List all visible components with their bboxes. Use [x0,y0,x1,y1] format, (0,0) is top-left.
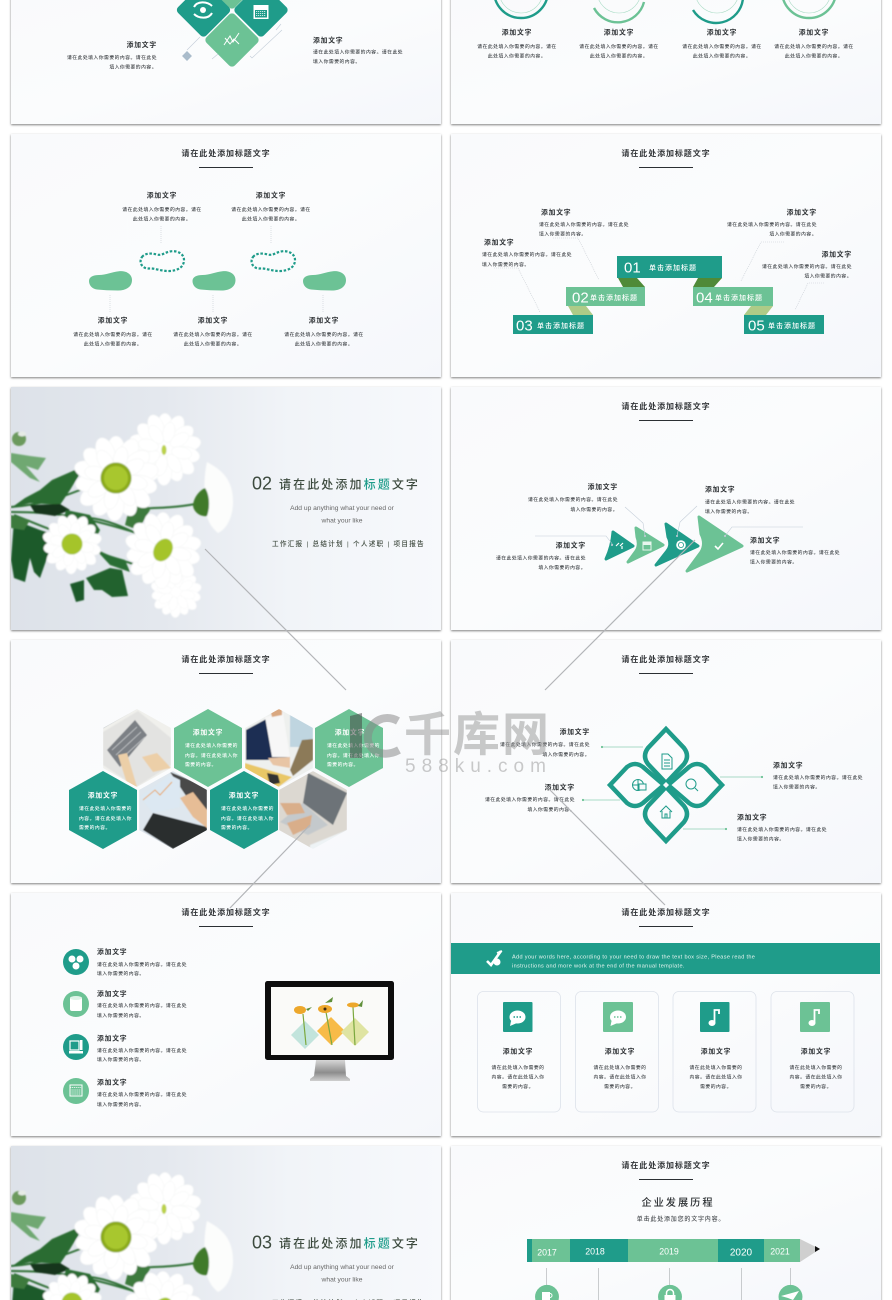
text hexagon: teal 2: 添加文字 [229,790,259,800]
heading: 请在此处添加标题文字 [182,148,270,158]
petal: top [645,729,687,783]
text block: bottom 2: 此处填入你需要的内容。 [184,340,242,348]
timeline subtitle: 单击此处添加您的文字内容。 [637,1215,725,1223]
arrow 1 [606,532,633,559]
text block: left: 填入你需要的内容。 [109,64,157,70]
text block 4: 请在此处填入你需要的内容。请在 [774,43,854,50]
text hexagon: green 2 [315,709,383,787]
banner: instructions and more work at the end of the manual template. [512,964,685,970]
text hexagon: green 1: 请在此处填入你需要的 [185,742,238,749]
text block 1: 填入你需要的内容。 [542,751,590,758]
panel: four-petal diamond slide [451,640,881,883]
card 3: 内容。请在此处填入你 [690,1074,742,1080]
icon: top green diamond [204,0,260,10]
text block 3: 添加文字 [787,208,817,216]
text block 4: 添加文字 [799,28,829,36]
text hexagon: teal 2: 内容。请在此处填入你 [221,815,274,822]
text block 3 [97,1034,187,1063]
petal: bottom [645,787,687,841]
ribbon 04 [693,287,773,306]
icon: dashed footprint 1 [141,251,184,271]
section number: 03 [252,1232,272,1252]
ribbon 04: 04 [696,290,713,306]
icon: padlock [658,1285,682,1300]
leader lines [582,746,763,830]
icon: green diamond with chart glyph [204,12,260,68]
icon: presentation [63,1034,89,1060]
text block: left [67,40,157,70]
text block 3: 添加文字 [97,1034,127,1042]
heading: 请在此处添加标题文字 [622,654,710,664]
text block 4: 填入你需要的内容。 [804,272,852,280]
text block 4: 请在此处填入你需要的内容。请在此处 [750,549,840,556]
text block 1: 请在此处填入你需要的内容。请在此处 [528,496,618,503]
banner: Add your words here, according to your need to draw the text box size, Please read the [512,954,755,960]
text block: top 2: 请在此处填入你需要的内容。请在 [231,206,311,213]
petal: left [610,764,664,806]
watermark: logo [350,713,399,758]
text hexagon: teal 1: 内容。请在此处填入你 [79,815,132,822]
text block 4: 添加文字 [737,812,767,822]
heading [622,907,710,927]
timeline stems [546,1268,790,1300]
card 3: 添加文字 [701,1046,731,1056]
panel: icon list with monitor slide [11,893,441,1136]
subtitle [290,505,395,524]
ribbon 01 [617,256,722,278]
text block: left: 添加文字 [127,40,157,49]
text block 4: 请在此处填入你需要的内容。请在此处 [97,1091,187,1098]
text block 3: 请在此处填入你需要的内容。请在此处 [496,554,586,562]
text block 2: 添加文字 [604,28,634,36]
text block 2: 填入你需要的内容。 [705,508,753,515]
dashed connectors [110,226,323,312]
pencil timeline bar: 2020 [730,1248,753,1258]
text hexagon: teal 2: 需要的内容。 [221,824,253,831]
text block 1: 请在此处填入你需要的内容。请在 [477,43,557,50]
text block 4: 添加文字 [750,536,780,544]
banner [451,943,880,974]
text block 3: 填入你需要的内容。 [773,784,821,790]
four-petal outline [610,729,722,841]
text block: top 1: 添加文字 [147,190,177,200]
text block 1: 填入你需要的内容。 [539,230,587,238]
text hexagon: green 2: 内容。请在此处填入你 [327,752,380,759]
icon: calendar [63,1078,89,1104]
card 3 [673,992,756,1112]
pencil timeline bar: 2017 [537,1248,557,1258]
panel: hexagon grid slide [11,640,441,883]
icon: paper plane [778,1285,802,1300]
text block 3: 填入你需要的内容。 [769,230,817,238]
watermark: domain: 588ku.com [405,756,552,777]
heading [182,907,270,927]
text block: top 1: 请在此处填入你需要的内容。请在 [122,206,202,213]
text block 3: 请在此处填入你需要的内容。请在此处 [97,1047,187,1054]
text block 4: 填入你需要的内容。 [737,836,785,842]
text block 4 [737,812,827,842]
arrow 4 [687,517,742,571]
text block 2: 请在此处填入你需要的内容。请在此处 [485,796,575,803]
heading [622,401,710,421]
icon: magnifier [686,779,698,791]
text block 1 [500,727,590,758]
card 2: 需要的内容。 [604,1083,636,1090]
icon: cylinder [63,991,89,1017]
watermark: brand: 千库网 [404,708,551,761]
pencil timeline bar [527,1239,820,1262]
photo hexagon: laptop typing [279,771,347,849]
ribbon 05: 05 [748,318,765,334]
text block 2: 填入你需要的内容。 [482,261,530,268]
text block: bottom 2: 添加文字 [198,316,228,324]
text block 1: 请在此处填入你需要的内容。请在此处 [539,221,629,228]
text block: top 2: 此处填入你需要的内容。 [242,216,300,222]
pencil timeline bar: 2019 [659,1246,679,1256]
ribbon 03 [513,315,593,334]
text block 1: 添加文字 [541,208,571,216]
text block: bottom 3: 此处填入你需要的内容。 [295,340,353,348]
card 2 [576,992,658,1112]
watermark logo and text [350,708,552,777]
card 2: 内容。请在此处填入你 [594,1074,646,1080]
diagonal lines [205,540,695,908]
icon: wrench and gear [487,951,502,966]
subtitle: Add up anything what your need or [290,1264,395,1271]
text block 3: 添加文字 [556,540,586,550]
text block 3: 添加文字 [707,28,737,36]
text block 3: 此处填入你需要的内容。 [693,52,751,60]
text block 2: 添加文字 [545,782,575,792]
ribbon 02 [566,287,645,306]
text block 3: 填入你需要的内容。 [538,564,586,571]
text block: top 2 [231,190,311,222]
text block: bottom 3 [284,316,364,348]
text block: bottom 3: 请在此处填入你需要的内容。请在 [284,331,364,338]
card 2: 添加文字 [605,1046,635,1056]
text block 4: 此处填入你需要的内容。 [785,52,843,60]
text block 4: 请在此处填入你需要的内容。请在此处 [762,263,852,270]
text block: top 1 [122,190,202,222]
icon: footprint 2 [192,271,236,290]
text hexagon: teal 2 [210,771,278,849]
text block 1: 填入你需要的内容。 [97,970,145,977]
icon: dashed footprint 2 [252,251,295,271]
photo: white daisies [11,1171,233,1300]
card 4 [771,992,854,1112]
card 1: 请在此处填入你需要的 [492,1064,544,1071]
text block 3: 请在此处填入你需要的内容。请在 [682,43,762,50]
text block 3: 填入你需要的内容。 [97,1056,145,1063]
ribbon 02: 单击添加标题 [590,293,638,302]
text block 4 [97,1078,187,1108]
ribbon 01: 01 [624,260,641,276]
heading: 请在此处添加标题文字 [622,401,710,411]
section number: 02 [252,474,272,494]
panel: ribbon staircase slide [451,134,881,377]
text block 2: 填入你需要的内容。 [527,806,575,813]
icon: house [660,806,672,818]
ribbon 03: 03 [516,318,533,334]
card 1: 内容。请在此处填入你 [492,1074,544,1080]
text block 3: 请在此处填入你需要的内容。请在此处 [773,774,863,781]
text block: bottom 1: 此处填入你需要的内容。 [84,340,142,348]
card 4: 需要的内容。 [800,1083,832,1090]
icon: teal diamond with calendar glyph [233,0,289,38]
text hexagon: teal 1: 请在此处填入你需要的 [79,805,132,812]
text block 1 [539,208,629,238]
card 3: 需要的内容。 [700,1083,732,1090]
panel: diamond icons slide [11,0,441,124]
icon: mug [535,1285,559,1300]
ring 4 [782,0,836,18]
text hexagon: green 2: 需要的内容。 [327,761,359,768]
pencil timeline bar: 2018 [585,1246,605,1256]
text hexagon: teal 1: 需要的内容。 [79,824,111,831]
text block 2: 此处填入你需要的内容。 [590,52,648,60]
text block 4 [762,250,852,280]
card 2: 请在此处填入你需要的 [594,1064,646,1071]
panel: footprints slide [11,134,441,377]
text block 1: 添加文字 [588,482,618,491]
panel: timeline slide [451,1146,881,1300]
text block: bottom 1 [73,316,153,348]
text block: right [313,36,403,65]
icon: document [662,754,672,769]
text block 3 [727,208,817,238]
decorative diamond marker [182,24,282,61]
heading [182,654,270,674]
text block 3 [682,28,762,60]
heading: 请在此处添加标题文字 [182,907,270,917]
panel: arrow process slide [451,387,881,630]
text block: bottom 3: 添加文字 [309,316,339,324]
card 1: 需要的内容。 [502,1083,534,1090]
card 1 [478,992,560,1112]
text block 1: 此处填入你需要的内容。 [488,52,546,60]
petal: right [668,764,722,806]
icon: footprint 1 [89,271,132,290]
ribbon 05 [744,315,824,334]
tags: 工作汇报 | 总结计划 | 个人述职 | 项目报告 [272,539,425,548]
panel: section 03 divider [11,1146,441,1300]
heading [622,654,710,674]
icon: cubes [63,949,89,975]
text block 3: 请在此处填入你需要的内容。请在此处 [727,221,817,228]
text block: bottom 1: 添加文字 [98,316,128,324]
text block 1: 添加文字 [97,947,127,956]
text block 2 [485,782,575,813]
photo: white daisies [11,412,233,618]
panel: section 02 divider [11,387,441,630]
dotted leader lines [494,238,824,312]
text block: bottom 2 [173,316,253,348]
text block: top 1: 此处填入你需要的内容。 [133,216,191,222]
text block 4: 添加文字 [97,1078,127,1086]
text block 1 [477,28,557,60]
text block 1: 添加文字 [560,727,590,736]
leader lines [535,506,803,546]
photo hexagon: writing chart at laptop [139,771,207,849]
text block: bottom 2: 请在此处填入你需要的内容。请在 [173,331,253,338]
ribbon 03: 单击添加标题 [537,321,585,330]
ring 2 [594,0,644,22]
text block 3 [496,540,586,571]
text block 4 [774,28,854,60]
text block 1 [97,947,187,977]
subtitle: Add up anything what your need or [290,505,395,512]
text block 1: 请在此处填入你需要的内容。请在此处 [500,741,590,748]
text hexagon: green 1: 需要的内容。 [185,761,217,768]
text hexagon: green 2: 请在此处填入你需要的 [327,742,380,749]
panel: banner and four cards slide [451,893,881,1136]
heading: 请在此处添加标题文字 [182,654,270,664]
ribbon 05: 单击添加标题 [768,321,816,330]
card 4: 请在此处填入你需要的 [790,1064,842,1071]
text block 4: 请在此处填入你需要的内容。请在此处 [737,826,827,833]
ring 1 [494,0,548,18]
icon: teal diamond with sync glyph [175,0,232,38]
text block 2 [482,238,572,268]
subtitle: what your like [321,518,363,524]
timeline title: 企业发展历程 [641,1196,715,1209]
text hexagon: green 2: 添加文字 [335,728,365,736]
text block 1: 请在此处填入你需要的内容。请在此处 [97,961,187,968]
ribbon 04: 单击添加标题 [715,293,763,302]
text block 2: 请在此处填入你需要的内容。请在此处 [97,1002,187,1009]
photo hexagon: laptop and hands [103,708,171,787]
card 4: 添加文字 [801,1046,831,1056]
text block 4: 填入你需要的内容。 [97,1101,145,1108]
text hexagon: teal 2: 请在此处填入你需要的 [221,805,274,812]
panel: four ring charts slide [451,0,881,124]
card 3: 请在此处填入你需要的 [690,1064,742,1071]
ring 3 [693,0,743,23]
text block 1 [528,482,618,513]
arrow 2 [628,528,663,562]
text block 2: 添加文字 [97,989,127,998]
text block 2 [97,989,187,1019]
subtitle: what your like [321,1276,363,1284]
pencil timeline bar: 2021 [770,1246,790,1256]
text block 3: 添加文字 [773,760,803,770]
text hexagon: green 1: 内容。请在此处填入你 [185,752,238,759]
text block 4: 填入你需要的内容。 [750,558,798,566]
text block: right: 填入你需要的内容。 [313,58,361,65]
card 1: 添加文字 [503,1046,533,1056]
text block 2: 请在此处填入你需要的内容。请在此处 [482,251,572,258]
heading: 请在此处添加标题文字 [622,1160,710,1170]
section title: 请在此处添加标题文字 [279,476,420,492]
arrow 3 [656,524,698,565]
text block: right: 请在此处填入你需要的内容。请在此处 [313,48,403,56]
text block 1: 添加文字 [502,28,532,36]
text block 2 [705,484,795,515]
text hexagon: green 1: 添加文字 [193,728,223,736]
ribbon 01: 单击添加标题 [649,263,697,272]
text block 2 [579,28,659,60]
text block 3 [773,760,863,790]
text block 4 [750,536,840,566]
text block: left: 请在此处填入你需要的内容。请在此处 [67,54,157,61]
photo hexagon: businessman at laptop [245,709,313,788]
heading: 请在此处添加标题文字 [622,907,710,917]
text block 2: 填入你需要的内容。 [97,1012,145,1019]
text hexagon: green 1 [174,709,242,787]
ribbon connectors [568,278,773,315]
text block: bottom 1: 请在此处填入你需要的内容。请在 [73,331,153,338]
text block 2: 添加文字 [484,238,514,246]
text block 1: 填入你需要的内容。 [570,506,618,513]
text block 2: 添加文字 [705,484,735,494]
icon: footprint 3 [303,271,346,290]
heading [622,148,710,168]
heading [182,148,270,168]
text block 4: 添加文字 [822,250,852,258]
text block 2: 请在此处填入你需要的内容。请在此处 [705,498,795,506]
heading [622,1160,710,1180]
text block 2: 请在此处填入你需要的内容。请在 [579,43,659,50]
text block: right: 添加文字 [313,36,343,44]
text block: top 2: 添加文字 [256,190,286,200]
icon: globe window [632,780,646,791]
section title: 请在此处添加标题文字 [279,1236,420,1250]
ribbon 02: 02 [572,290,589,306]
text hexagon: teal 1: 添加文字 [88,790,118,800]
subtitle [290,1264,395,1284]
card 4: 内容。请在此处填入你 [790,1074,842,1080]
centre gap [663,782,669,788]
heading: 请在此处添加标题文字 [622,148,710,158]
text hexagon: teal 1 [69,771,137,849]
monitor with flowers on screen [265,981,394,1081]
